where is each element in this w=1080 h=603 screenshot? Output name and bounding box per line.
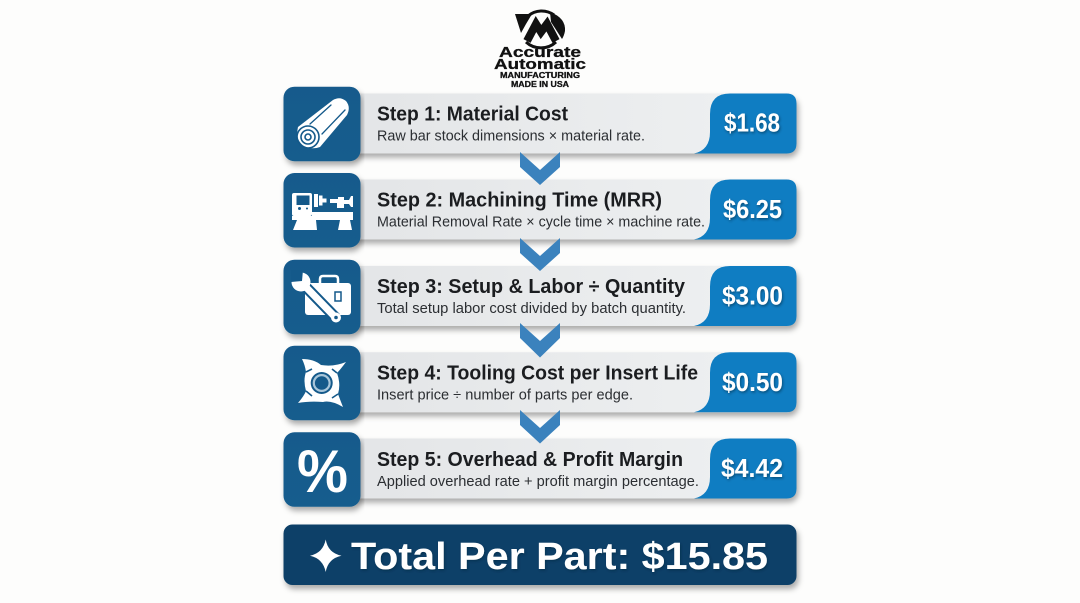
step 5 price tab: $4.42 bbox=[721, 453, 783, 483]
logo wordmark: MADE IN USA bbox=[511, 80, 569, 89]
step 5 heading: Step 5: Overhead & Profit Margin bbox=[377, 449, 683, 471]
step 1 price tab bbox=[694, 94, 796, 154]
step 1 price tab: $1.68 bbox=[724, 108, 780, 138]
step 1 bar bbox=[340, 94, 796, 154]
step 5 bar bbox=[340, 438, 796, 498]
step 3 description: Total setup labor cost divided by batch quantity. bbox=[377, 301, 686, 317]
step 3 heading: Step 3: Setup & Labor ÷ Quantity bbox=[377, 276, 686, 298]
step 2 bar bbox=[340, 180, 796, 240]
logo: Accurate Automatic Manufacturing bbox=[494, 11, 586, 89]
icon: percent bbox=[284, 432, 360, 507]
step 2 description: Material Removal Rate × cycle time × machine rate. bbox=[377, 214, 705, 230]
arrow: step 2 to step 3 bbox=[520, 238, 560, 271]
step 4 price tab bbox=[694, 352, 796, 412]
step 4 description: Insert price ÷ number of parts per edge. bbox=[377, 388, 633, 404]
step 1 description: Raw bar stock dimensions × material rate. bbox=[377, 128, 645, 144]
step 3 price tab: $3.00 bbox=[722, 280, 783, 310]
icon: percent: % bbox=[297, 438, 348, 505]
step 4 bar bbox=[340, 352, 796, 412]
icon: lathe bbox=[284, 173, 360, 248]
logo wordmark: Automatic bbox=[494, 56, 586, 73]
step 4 price tab: $0.50 bbox=[722, 367, 783, 397]
step 4 heading: Step 4: Tooling Cost per Insert Life bbox=[377, 362, 698, 384]
step 2 price tab bbox=[694, 180, 796, 240]
total label: Total Per Part: $15.85 bbox=[351, 536, 768, 578]
logo wordmark: MANUFACTURING bbox=[500, 71, 580, 80]
step 5 description: Applied overhead rate + profit margin percentage. bbox=[377, 474, 699, 490]
step 1 heading: Step 1: Material Cost bbox=[377, 104, 568, 126]
logo wordmark bbox=[494, 44, 586, 89]
step 2 heading: Step 2: Machining Time (MRR) bbox=[377, 190, 662, 212]
step 5 price tab bbox=[694, 438, 796, 498]
step 3 price tab bbox=[694, 266, 796, 326]
arrow: step 4 to step 5 bbox=[520, 410, 560, 444]
icon: sparkle bbox=[310, 540, 342, 572]
icon: bar stock bbox=[284, 87, 360, 161]
step 2 price tab: $6.25 bbox=[723, 194, 782, 224]
icon: cutting insert bbox=[284, 346, 360, 420]
logo wordmark: Accurate bbox=[499, 44, 581, 61]
icon: wrench and toolbox bbox=[284, 260, 360, 334]
arrow: step 1 to step 2 bbox=[520, 152, 560, 185]
logo mark bbox=[515, 11, 565, 48]
total banner bbox=[284, 524, 796, 585]
step 3 bar bbox=[340, 266, 796, 326]
arrow: step 3 to step 4 bbox=[520, 323, 560, 358]
